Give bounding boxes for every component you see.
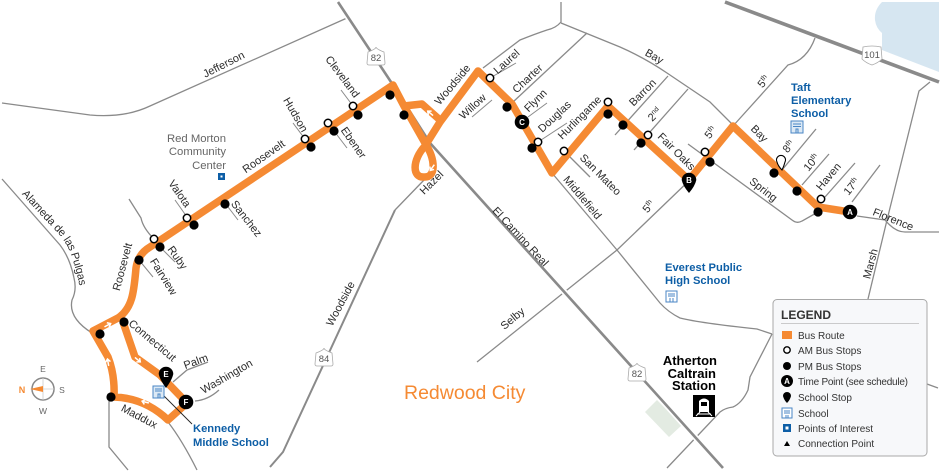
highway shields: 82: [371, 53, 381, 64]
street labels: Laurel: [492, 47, 522, 77]
Everest Public High School label: High School: [665, 275, 730, 287]
Red Morton Community Center label: Community: [169, 146, 226, 158]
street labels: Ebener: [338, 125, 368, 161]
street labels: 8: [781, 143, 794, 155]
time point B with school stop pin: B: [686, 176, 692, 185]
street labels: Maddux: [119, 403, 160, 432]
street labels: Hazel: [418, 169, 446, 197]
compass: W: [39, 406, 47, 416]
street labels: 5: [756, 78, 769, 90]
highway shields: 101: [864, 50, 880, 61]
Red Morton Community Center label: Center: [192, 160, 226, 172]
legend: AM stops: AM Bus Stops: [798, 346, 861, 357]
compass: N: [19, 385, 25, 395]
street labels: th: [784, 138, 793, 147]
Atherton Caltrain Station label: Caltrain: [668, 366, 716, 381]
Kennedy Middle School label: Middle School: [193, 437, 269, 449]
Everest Public High School label: Everest Public: [665, 262, 742, 274]
street labels: Roosevelt: [111, 242, 135, 292]
street labels: Valota: [165, 178, 193, 211]
street labels: Roosevelt: [241, 138, 287, 176]
street labels: Douglas: [536, 99, 574, 135]
street labels: th: [849, 176, 858, 185]
street labels: [22, 47, 915, 432]
time point B with school stop pin: [682, 173, 696, 193]
compass: S: [59, 385, 65, 395]
street labels: Woodside: [433, 62, 473, 108]
highway shields: 84: [319, 354, 329, 365]
street labels: th: [644, 198, 653, 207]
legend: school stop: School Stop: [798, 393, 852, 404]
street labels: Hudson: [280, 96, 310, 134]
time point A: A: [847, 208, 853, 217]
street labels: 17: [842, 181, 859, 198]
street labels: San Mateo: [577, 152, 623, 198]
Redwood City label: Redwood City: [404, 382, 526, 404]
street labels: Bay: [748, 123, 770, 145]
street labels: Charter: [510, 62, 546, 96]
street labels: Sanchez: [228, 198, 264, 240]
street labels: th: [706, 124, 715, 133]
street labels: Ruby: [165, 244, 190, 272]
water: bay: [875, 2, 939, 72]
street labels: Alameda de las Pulgas: [22, 191, 85, 286]
AM bus stops: [150, 74, 825, 243]
street labels: Washington: [199, 357, 255, 397]
street labels: th: [759, 73, 768, 82]
compass: E: [40, 364, 46, 374]
legend: school: School: [798, 409, 829, 420]
street labels: Hurlingame: [556, 94, 604, 142]
bus route line: [93, 71, 850, 420]
Kennedy Middle School label: Kennedy: [193, 423, 241, 435]
street labels: Selby: [499, 305, 528, 332]
school leader line: [164, 396, 192, 424]
time point E with school stop pin: [159, 367, 173, 388]
street labels: Fairview: [147, 256, 179, 298]
icon: Kennedy school: [153, 386, 164, 398]
park area: [645, 400, 682, 437]
icon: Taft school: [791, 121, 803, 133]
street labels: Florence: [871, 206, 915, 234]
Red Morton Community Center label: Red Morton: [167, 133, 226, 145]
Taft Elementary School label: School: [791, 108, 828, 120]
PM bus stops: [95, 90, 823, 402]
street labels: Bay: [643, 47, 666, 67]
street labels: th: [809, 152, 818, 161]
legend: school: [782, 408, 829, 420]
street labels: 5: [641, 203, 654, 215]
time point C: [515, 115, 529, 129]
legend: PM stops: PM Bus Stops: [798, 362, 861, 373]
highway shields: 82: [632, 369, 642, 380]
street labels: 10: [802, 157, 819, 174]
legend: bus route: Bus Route: [798, 331, 845, 342]
Atherton Caltrain Station label: Station: [672, 378, 716, 393]
compass: [19, 364, 65, 416]
street labels: Cleveland: [322, 54, 362, 100]
legend: time point: A: [784, 377, 790, 386]
street labels: Fair Oaks: [655, 131, 697, 173]
street labels: Spring: [747, 175, 779, 205]
street labels: Willow: [457, 92, 489, 122]
street labels: Connecticut: [126, 318, 178, 364]
legend: time point: Time Point (see schedule): [798, 377, 908, 388]
street labels: Flynn: [522, 87, 550, 115]
icon: point of interest: [218, 173, 225, 180]
time point F: F: [184, 398, 189, 407]
street labels: 5: [703, 129, 716, 141]
street labels: El Camino Real: [490, 205, 550, 269]
street labels: Haven: [814, 161, 844, 193]
time point C: C: [519, 118, 525, 127]
legend heading: LEGEND: [781, 308, 831, 322]
street labels: 2: [646, 111, 659, 124]
icon: train: [693, 395, 715, 417]
street labels: Marsh: [861, 248, 881, 280]
street labels: Palm: [182, 352, 210, 372]
time point F: [179, 395, 193, 409]
Atherton Caltrain Station label: Atherton: [663, 353, 717, 368]
legend: points of interest: Points of Interest: [798, 424, 873, 435]
Taft Elementary School label: Elementary: [791, 95, 852, 107]
legend: connection point: Connection Point: [798, 439, 874, 450]
street labels: nd: [650, 105, 660, 116]
school stop: Taft: [776, 155, 786, 170]
Taft Elementary School label: Taft: [791, 82, 811, 94]
street labels: Middlefield: [561, 174, 603, 222]
legend panel: [773, 300, 927, 456]
highway shields: [315, 46, 882, 381]
street labels: Woodside: [324, 280, 358, 328]
icon: Everest school: [666, 291, 677, 302]
time point E with school stop pin: E: [163, 370, 169, 379]
street labels: Barron: [627, 77, 659, 109]
time point A: [843, 205, 857, 219]
direction arrows: [103, 109, 436, 405]
street labels: Jefferson: [201, 49, 247, 81]
